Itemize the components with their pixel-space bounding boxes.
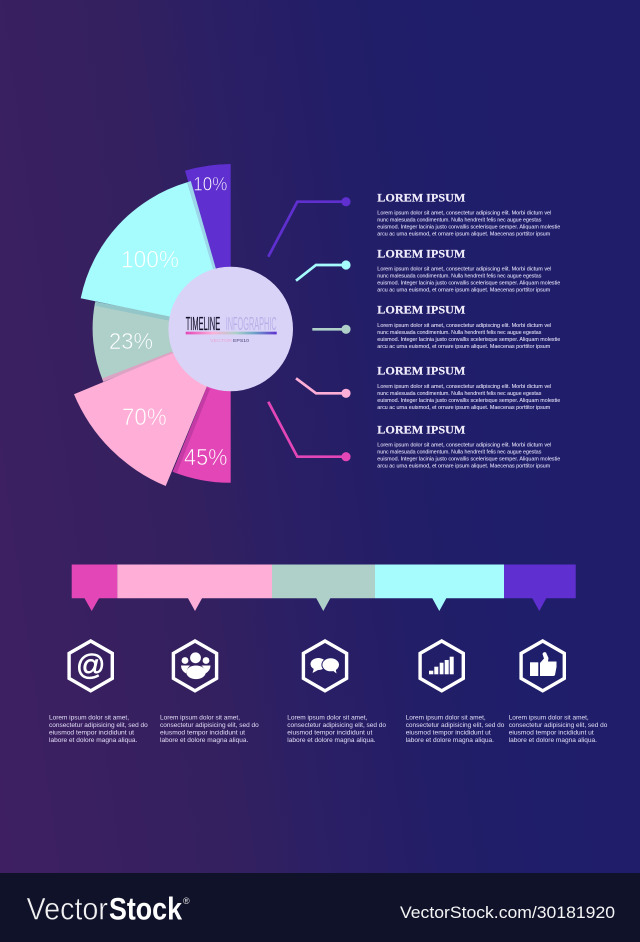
icon: at sign bbox=[69, 641, 112, 691]
icon: people bbox=[173, 641, 217, 691]
caption 1: eiusmod tempor incididunt ut bbox=[49, 730, 134, 736]
icon: at sign: @ bbox=[76, 650, 105, 682]
text block 4: Lorem ipsum dolor sit amet, consectetur adipiscing elit. Morbi dictum vel bbox=[377, 384, 551, 390]
caption 3 bbox=[287, 714, 386, 744]
center circle with title: TIMELINE bbox=[186, 314, 220, 334]
slice: 45% bbox=[173, 329, 231, 483]
text block 1: LOREM IPSUM bbox=[377, 190, 465, 204]
slice: 100% bbox=[81, 181, 231, 329]
connector: purple bbox=[268, 197, 351, 257]
text block 2 bbox=[377, 246, 560, 293]
text block 1: nunc malesuada condimentum. Nulla hendrerit felis nec augue egestas bbox=[377, 217, 541, 223]
center circle with title bbox=[168, 267, 293, 391]
caption 3: labore et dolore magna aliqua. bbox=[287, 737, 376, 744]
connector: pink bbox=[296, 378, 351, 398]
caption 5 bbox=[509, 714, 608, 744]
text block 3: LOREM IPSUM bbox=[377, 302, 465, 316]
text block 3: Lorem ipsum dolor sit amet, consectetur adipiscing elit. Morbi dictum vel bbox=[377, 323, 551, 329]
text block 2: nunc malesuada condimentum. Nulla hendrerit felis nec augue egestas bbox=[377, 273, 541, 279]
caption 2: labore et dolore magna aliqua. bbox=[160, 737, 248, 744]
caption 4: labore et dolore magna aliqua. bbox=[406, 737, 494, 744]
text block 2: euismod. Integer lacinia justo convallis scelerisque semper. Aliquam molestie bbox=[377, 280, 560, 286]
caption 1: Lorem ipsum dolor sit amet, bbox=[49, 714, 129, 722]
text block 4: euismod. Integer lacinia justo convallis scelerisque semper. Aliquam molestie bbox=[377, 398, 560, 404]
caption 1: labore et dolore magna aliqua. bbox=[49, 737, 137, 744]
caption 2 bbox=[160, 714, 259, 744]
caption 4 bbox=[406, 714, 505, 744]
slice: 45%: 45% bbox=[184, 444, 228, 470]
text block 1 bbox=[377, 190, 560, 237]
connector: cyan bbox=[296, 260, 351, 281]
icon: bar signal bbox=[420, 641, 463, 691]
footer band: Stock bbox=[109, 890, 182, 926]
caption 5: consectetur adipisicing elit, sed do bbox=[509, 722, 608, 729]
text block 4: nunc malesuada condimentum. Nulla hendrerit felis nec augue egestas bbox=[377, 391, 541, 397]
caption 1 bbox=[49, 714, 148, 744]
text block 4: arcu ac urna euismod, et ornare ipsum aliquet. Maecenas porttitor ipsum bbox=[377, 405, 550, 411]
slice: 10% bbox=[185, 164, 231, 329]
text block 2: LOREM IPSUM bbox=[377, 246, 465, 260]
footer band: Vector bbox=[26, 890, 108, 926]
slice: 100%: 100% bbox=[121, 246, 179, 273]
footer band: VectorStock.com/30181920 bbox=[400, 904, 615, 922]
text block 3 bbox=[377, 302, 560, 350]
text block 4: LOREM IPSUM bbox=[377, 364, 465, 378]
center circle with title: INFOGRAPHIC bbox=[226, 314, 277, 334]
text block 1: euismod. Integer lacinia justo convallis scelerisque semper. Aliquam molestie bbox=[377, 224, 560, 230]
caption 2: Lorem ipsum dolor sit amet, bbox=[160, 714, 240, 722]
slice: 23% bbox=[93, 303, 231, 382]
text block 1: Lorem ipsum dolor sit amet, consectetur adipiscing elit. Morbi dictum vel bbox=[377, 210, 551, 216]
text block 5 bbox=[377, 422, 560, 470]
connector: grey bbox=[312, 325, 351, 334]
text block 1: arcu ac urna euismod, et ornare ipsum aliquet. Maecenas porttitor ipsum bbox=[377, 231, 550, 237]
center circle with title: EPS10 bbox=[233, 338, 250, 343]
text block 3: euismod. Integer lacinia justo convallis scelerisque semper. Aliquam molestie bbox=[377, 337, 560, 343]
icon: thumbs up bbox=[521, 641, 564, 691]
caption 1: consectetur adipisicing elit, sed do bbox=[49, 722, 148, 729]
connector: magenta bbox=[268, 402, 351, 461]
slice: 70% bbox=[74, 329, 231, 486]
caption 5: eiusmod tempor incididunt ut bbox=[509, 730, 594, 736]
caption 3: Lorem ipsum dolor sit amet, bbox=[287, 714, 367, 722]
text block 5: LOREM IPSUM bbox=[377, 422, 465, 436]
caption 4: Lorem ipsum dolor sit amet, bbox=[406, 714, 486, 722]
text block 4 bbox=[377, 364, 560, 411]
caption 5: Lorem ipsum dolor sit amet, bbox=[509, 714, 589, 722]
text block 3: arcu ac urna euismod, et ornare ipsum aliquet. Maecenas porttitor ipsum bbox=[377, 344, 550, 350]
text block 5: euismod. Integer lacinia justo convallis scelerisque semper. Aliquam molestie bbox=[377, 456, 560, 462]
caption 3: consectetur adipisicing elit, sed do bbox=[287, 722, 386, 729]
slice: 70%: 70% bbox=[122, 404, 167, 431]
caption 3: eiusmod tempor incididunt ut bbox=[287, 730, 372, 736]
pie chart bbox=[74, 164, 293, 486]
caption 5: labore et dolore magna aliqua. bbox=[509, 737, 597, 744]
footer band: ® bbox=[183, 896, 190, 906]
caption 2: eiusmod tempor incididunt ut bbox=[160, 730, 245, 736]
slice: 23%: 23% bbox=[109, 328, 153, 354]
footer band bbox=[0, 873, 640, 942]
text block 5: Lorem ipsum dolor sit amet, consectetur adipiscing elit. Morbi dictum vel bbox=[377, 442, 551, 448]
segmented timeline bar bbox=[72, 564, 576, 611]
text block 5: arcu ac urna euismod, et ornare ipsum aliquet. Maecenas porttitor ipsum bbox=[377, 464, 550, 470]
slice: 10%: 10% bbox=[193, 174, 227, 196]
caption 4: eiusmod tempor incididunt ut bbox=[406, 730, 491, 736]
text block 5: nunc malesuada condimentum. Nulla hendrerit felis nec augue egestas bbox=[377, 450, 541, 456]
caption 2: consectetur adipisicing elit, sed do bbox=[160, 722, 259, 729]
icon: speech bubbles bbox=[303, 641, 347, 691]
caption 4: consectetur adipisicing elit, sed do bbox=[406, 722, 505, 729]
center circle with title: VECTOR bbox=[210, 338, 233, 343]
text block 3: nunc malesuada condimentum. Nulla hendrerit felis nec augue egestas bbox=[377, 330, 541, 336]
text block 2: arcu ac urna euismod, et ornare ipsum aliquet. Maecenas porttitor ipsum bbox=[377, 287, 550, 293]
text block 2: Lorem ipsum dolor sit amet, consectetur adipiscing elit. Morbi dictum vel bbox=[377, 266, 551, 272]
